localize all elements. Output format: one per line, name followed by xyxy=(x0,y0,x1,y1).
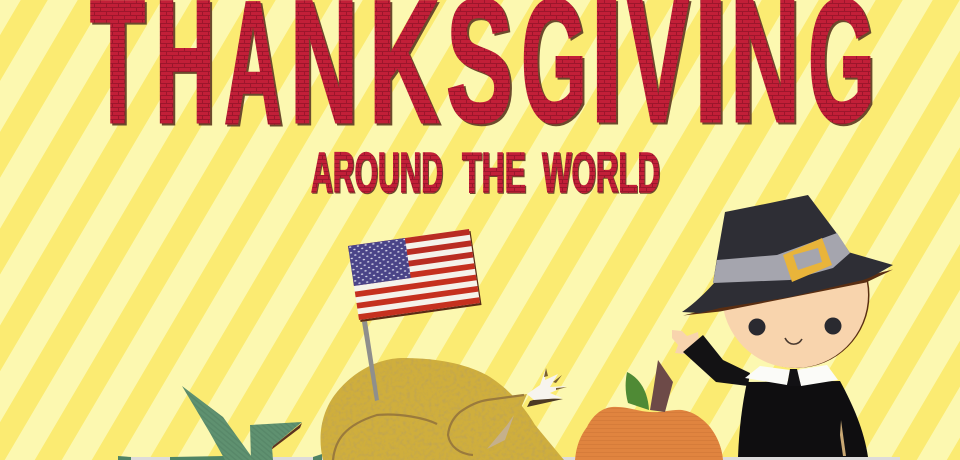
flag xyxy=(348,229,482,322)
plate strip along the bottom xyxy=(118,457,900,460)
subtitle: AROUND THE WORLD: AROUND xyxy=(311,141,443,205)
turkey drumstick frill xyxy=(527,368,567,407)
pumpkin leaf xyxy=(626,372,649,410)
pilgrim hand xyxy=(672,330,699,354)
turkey wing xyxy=(333,415,437,460)
icon: roast turkey xyxy=(321,358,567,460)
flag pole xyxy=(362,321,379,401)
pilgrim arm xyxy=(683,335,750,386)
icon: American flag on a toothpick xyxy=(348,229,482,401)
hat band xyxy=(713,233,850,283)
pilgrim smile xyxy=(785,338,802,344)
hat buckle xyxy=(783,238,832,282)
subtitle: AROUND THE WORLD: WORLD xyxy=(542,141,660,205)
pilgrim face xyxy=(724,281,870,368)
body fold xyxy=(840,420,846,456)
turkey drumstick xyxy=(448,394,527,455)
pilgrim body xyxy=(738,381,868,457)
subtitle: AROUND THE WORLD: THE xyxy=(462,141,526,205)
pilgrim hat xyxy=(682,195,893,316)
pilgrim eyes xyxy=(748,318,766,336)
character: pilgrim xyxy=(672,195,893,457)
title: THANKSGIVING xyxy=(90,0,875,161)
drumstick highlight xyxy=(487,415,514,449)
pilgrim collar xyxy=(745,365,838,386)
icon: green leaves xyxy=(118,386,322,460)
icon: pumpkin xyxy=(575,360,723,460)
pumpkin stem xyxy=(650,360,673,412)
